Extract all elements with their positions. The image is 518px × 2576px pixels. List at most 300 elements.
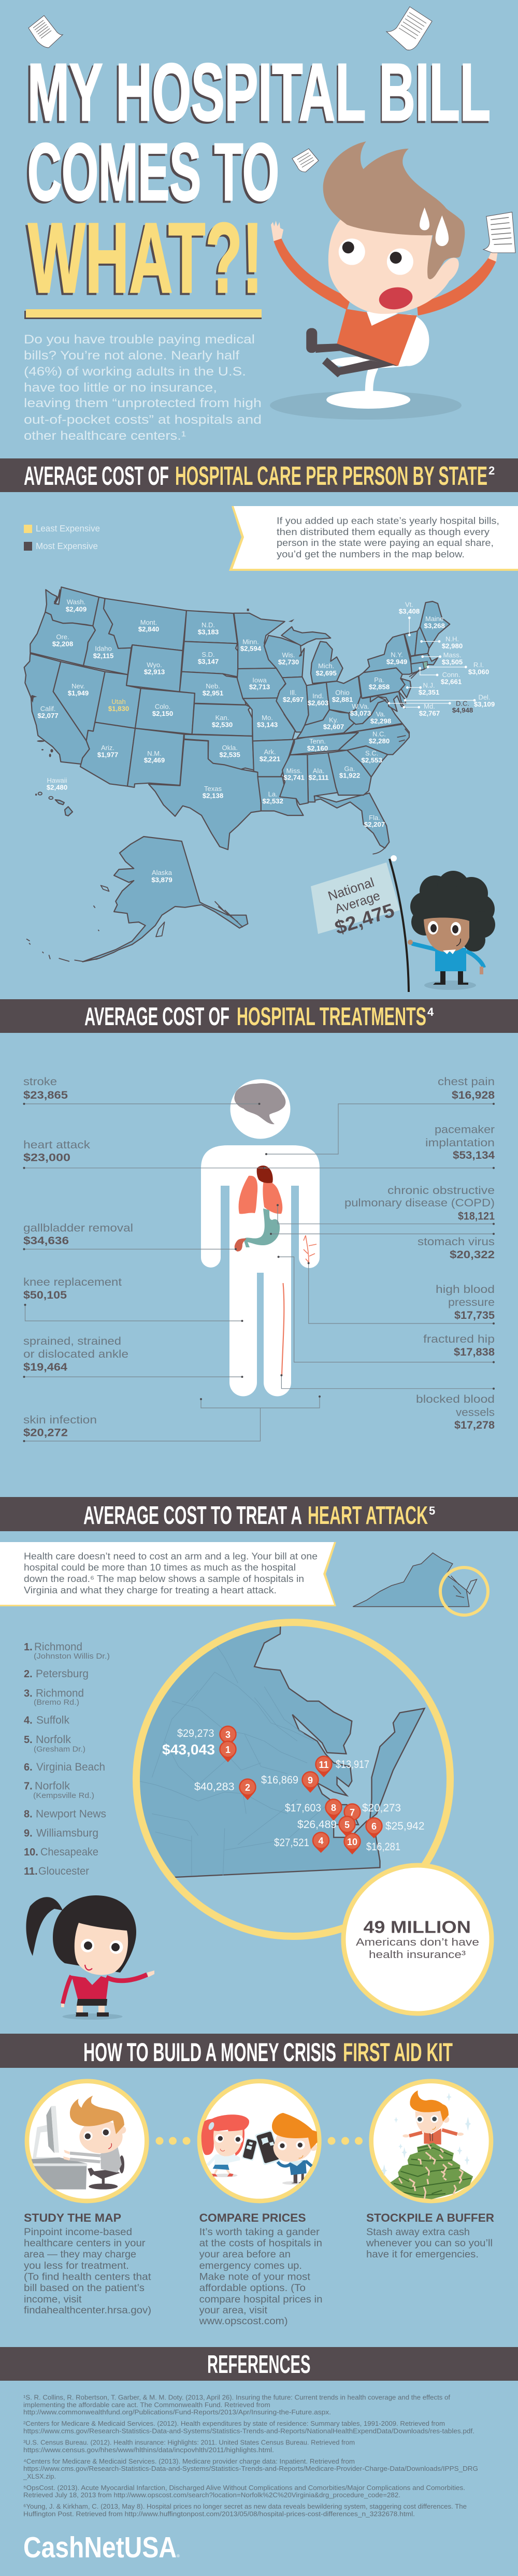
state label: Nev.: $1,949 bbox=[68, 689, 89, 697]
treatment: stroke bbox=[23, 1076, 261, 1105]
treatment: COPD: $18,121 bbox=[458, 1211, 495, 1222]
state label: Ohio bbox=[332, 689, 353, 703]
hospital list: (Kempsville Rd.) bbox=[33, 1791, 94, 1800]
state label: Ohio: $2,881 bbox=[332, 696, 353, 703]
hospital list: Chesapeake bbox=[40, 1846, 98, 1858]
state label: Minn. bbox=[240, 638, 262, 653]
state label: Texas bbox=[203, 785, 223, 800]
treatment: pacemaker implantation bbox=[264, 1124, 495, 1169]
state label: S.D.: S.D. bbox=[202, 651, 215, 658]
organ: lungs bbox=[239, 1176, 282, 1214]
treatment: skin infection: $20,272 bbox=[23, 1427, 68, 1439]
treatment: gallbladder removal: gallbladder removal bbox=[23, 1222, 133, 1234]
treatment: COPD: chronic obstructive bbox=[387, 1185, 495, 1197]
state label: Mont.: Mont. bbox=[140, 618, 157, 626]
step: stockpile a buffer bbox=[366, 2211, 494, 2260]
hospital list: Norfolk bbox=[36, 1734, 71, 1746]
flag pole bbox=[390, 859, 409, 992]
icon circle: man at computer bbox=[27, 2081, 147, 2201]
step: study the map: healthcare centers in your bbox=[24, 2238, 146, 2249]
state label: Wash.: Wash. bbox=[67, 598, 85, 606]
state label: Miss.: $2,741 bbox=[284, 774, 305, 782]
state label: N.Y. bbox=[386, 651, 407, 666]
step: compare prices: Make note of your most bbox=[199, 2271, 311, 2283]
state label with leader: N.H.: N.H. bbox=[445, 635, 459, 643]
state label: Ore. bbox=[52, 633, 73, 647]
title bbox=[25, 47, 491, 315]
hospital list: Richmond bbox=[34, 1641, 82, 1653]
references list bbox=[23, 2394, 478, 2518]
pin 3: 3 bbox=[225, 1730, 231, 1740]
hospital prices: $20,273 bbox=[362, 1802, 401, 1814]
pin 11 bbox=[316, 1756, 332, 1777]
references list: ²Centers for Medicare & Medicaid Services. (2012). Health expenditures by state of residence: Summary tables, 1991-2009. Retrieved from bbox=[23, 2420, 445, 2427]
organ: arm veins bbox=[304, 1235, 316, 1262]
pin 2: 2 bbox=[245, 1782, 250, 1793]
state label with leader: Vt. bbox=[399, 600, 420, 636]
state label: Ga.: $1,922 bbox=[339, 772, 360, 780]
stat circle: 49 million uninsured: Americans don’t have bbox=[356, 1937, 479, 1948]
state label: Wash.: $2,409 bbox=[66, 605, 87, 613]
state label: N.C. bbox=[369, 730, 390, 745]
treatment: stroke: $23,865 bbox=[23, 1089, 68, 1101]
pin 1 bbox=[220, 1742, 236, 1762]
hospital list: 3. bbox=[24, 1688, 33, 1700]
state label: Ariz. bbox=[97, 744, 118, 758]
state label with leader: N.H. bbox=[420, 635, 463, 650]
map: Hawaii islands bbox=[35, 792, 73, 816]
state label: Hawaii: $2,480 bbox=[47, 783, 67, 791]
state label: La. bbox=[263, 790, 283, 805]
treatment: blocked blood vessels: blocked blood bbox=[416, 1393, 495, 1405]
pin 3 bbox=[220, 1726, 236, 1747]
hospital prices: $26,489 bbox=[297, 1819, 337, 1831]
state label: Miss. bbox=[284, 767, 305, 782]
body figure silhouette bbox=[201, 1080, 320, 1397]
treatment: stroke: stroke bbox=[23, 1076, 57, 1088]
state label: Ind.: $2,603 bbox=[308, 699, 328, 707]
icon circle: couple comparing phones bbox=[199, 2081, 319, 2201]
organ: stomach bbox=[243, 1208, 280, 1247]
pin 6: 6 bbox=[371, 1821, 377, 1832]
state label: N.Y.: N.Y. bbox=[391, 651, 403, 658]
treatment: pacemaker implantation: implantation bbox=[425, 1137, 495, 1149]
state label: Kan. bbox=[212, 714, 233, 728]
treatment: high blood pressure bbox=[308, 1262, 495, 1325]
state label: Idaho: $2,115 bbox=[93, 652, 113, 659]
treatment: heart attack: $23,000 bbox=[23, 1152, 70, 1164]
hospital list: (Bremo Rd.) bbox=[34, 1698, 79, 1707]
section header: references bbox=[0, 2347, 518, 2381]
section header: first aid kit: HOW TO BUILD A MONEY CRISIS bbox=[83, 2038, 336, 2067]
treatment: sprained ankle bbox=[23, 1335, 243, 1378]
state label with leader: Del. bbox=[404, 694, 495, 708]
state label: Texas: $2,138 bbox=[203, 792, 223, 800]
intro text: out-of-pocket costs” at hospitals and bbox=[24, 413, 262, 427]
references list: ³U.S. Census Bureau. (2012). Health insurance: Highlights: 2011. United States Census Bureau. Retrieved from bbox=[23, 2439, 355, 2447]
state label: Ark.: Ark. bbox=[264, 748, 276, 756]
stat circle: 49 million uninsured bbox=[343, 1865, 492, 2013]
state label: Ind.: Ind. bbox=[312, 692, 324, 700]
state label: N.M.: $2,469 bbox=[144, 756, 165, 764]
pin 10 bbox=[344, 1834, 361, 1854]
treatment: heart attack: heart attack bbox=[23, 1139, 91, 1151]
state label with leader: N.J.: N.J. bbox=[423, 682, 435, 689]
treatment: pacemaker implantation: pacemaker bbox=[435, 1124, 495, 1136]
treatment: sprained ankle: sprained, strained bbox=[23, 1335, 121, 1347]
state label with leader: D.C. (most expensive): D.C. bbox=[456, 699, 469, 707]
state label: Miss.: Miss. bbox=[286, 767, 302, 774]
state label: Mo. bbox=[257, 714, 278, 728]
hospital prices: $17,603 bbox=[285, 1802, 321, 1814]
state label: Neb.: $2,951 bbox=[203, 689, 223, 697]
pin 6 bbox=[366, 1818, 382, 1838]
hospital prices bbox=[162, 1728, 425, 1853]
hospital prices: $13,917 bbox=[336, 1759, 369, 1771]
state label: Wis. bbox=[278, 651, 299, 666]
section header: heart attack: AVERAGE COST TO TREAT A bbox=[83, 1502, 302, 1530]
treatment: gallbladder removal: $34,636 bbox=[23, 1235, 69, 1247]
callout: heart attack intro: Health care doesn’t need to cost an arm and a leg. Your bill at one bbox=[24, 1551, 318, 1561]
state label: Colo.: Colo. bbox=[155, 703, 170, 711]
pin 5 bbox=[339, 1816, 355, 1837]
state label: Neb. bbox=[203, 682, 223, 697]
hospital list: Norfolk bbox=[35, 1780, 70, 1792]
state label: Mich.: $2,695 bbox=[316, 669, 337, 677]
section header: hospital treatments bbox=[0, 999, 518, 1033]
step: study the map: you less for treatment. bbox=[24, 2260, 129, 2271]
state label: Mont. bbox=[138, 618, 159, 633]
legend: least and most expensive bbox=[24, 523, 100, 551]
state label: N.D.: N.D. bbox=[202, 621, 215, 629]
state label: Neb.: Neb. bbox=[206, 682, 220, 690]
references list: https://www.census.gov/hhes/www/hlthins/data/incpovhlth/2011/highlights.html. bbox=[23, 2447, 274, 2454]
state label: Ala.: Ala. bbox=[313, 767, 324, 774]
treatment: stomach virus: stomach virus bbox=[418, 1236, 495, 1248]
pin 2 bbox=[239, 1779, 256, 1800]
title shadow: WHAT?! bbox=[26, 204, 261, 315]
state label: Ky.: Ky. bbox=[329, 716, 338, 724]
state label: Iowa bbox=[249, 677, 270, 691]
state label: N.M. bbox=[144, 750, 165, 764]
section header: references: REFERENCES bbox=[207, 2351, 311, 2379]
flag text bbox=[323, 872, 397, 939]
state label with leader: Conn.: Conn. bbox=[442, 671, 460, 679]
state label with leader: Vt.: Vt. bbox=[405, 600, 413, 608]
hospital list: 4. bbox=[24, 1715, 33, 1726]
state label: Wyo.: $2,913 bbox=[144, 668, 165, 675]
hospital list: Richmond bbox=[36, 1688, 84, 1700]
state label: N.D. bbox=[198, 621, 219, 636]
pin 4 bbox=[313, 1833, 329, 1853]
dots connector: first pair bbox=[155, 2137, 191, 2145]
icon: flying paper left bbox=[28, 16, 63, 48]
state label: Kan.: $2,530 bbox=[212, 721, 233, 728]
state label: Calif.: Calif. bbox=[40, 705, 55, 713]
treatment: pacemaker implantation: $53,134 bbox=[453, 1149, 495, 1161]
step: study the map: area — they may charge bbox=[24, 2249, 136, 2260]
stat circle: 49 million uninsured: 49 MILLION bbox=[364, 1918, 471, 1937]
state label: Idaho bbox=[93, 645, 113, 659]
intro text: (46%) of working adults in the U.S. bbox=[24, 365, 246, 379]
treatment: chest pain bbox=[265, 1076, 495, 1155]
step: stockpile a buffer: STOCKPILE A BUFFER bbox=[366, 2211, 494, 2224]
state label with leader: N.J. bbox=[406, 682, 439, 696]
state label: N.Y.: $2,949 bbox=[386, 658, 407, 666]
state label: Colo.: $2,150 bbox=[152, 710, 173, 717]
state label: Fla. bbox=[364, 814, 385, 828]
treatment: chest pain: chest pain bbox=[438, 1076, 495, 1088]
state label: Ala. bbox=[309, 767, 328, 782]
references list: ⁶Young, J. & Kirkham, C. (2013, May 8). Hospital prices no longer secret as new data reveals bewildering system, staggering cost differences. The bbox=[23, 2503, 467, 2510]
step: compare prices: at the costs of hospitals in bbox=[199, 2238, 322, 2249]
state label: Okla.: $2,535 bbox=[220, 751, 240, 758]
state label: W.Va.: W.Va. bbox=[352, 702, 369, 710]
map: Alaska bbox=[26, 837, 248, 962]
callout: how the map numbers work bbox=[229, 506, 518, 571]
map: southeastern Virginia hospitals bbox=[125, 1614, 450, 1936]
callout: heart attack intro: Virginia and what they charge for treating a heart attack. bbox=[24, 1585, 277, 1595]
callout: how the map numbers work: then distributed them equally as though every bbox=[277, 527, 490, 537]
state label: Iowa: Iowa bbox=[252, 677, 267, 684]
step: study the map: STUDY THE MAP bbox=[24, 2211, 121, 2224]
state label with leader: Mass.: $3,505 bbox=[442, 658, 463, 666]
state label: Nev. bbox=[68, 682, 89, 697]
treatment: sprained ankle: $19,464 bbox=[23, 1361, 67, 1373]
state label with leader: Del.: $3,109 bbox=[474, 700, 495, 708]
illustration: shocked man on chair bbox=[270, 141, 515, 420]
organ: leg vein bbox=[282, 1283, 284, 1375]
hospital prices: $25,942 bbox=[385, 1820, 425, 1832]
pin 7: 7 bbox=[350, 1807, 355, 1818]
treatment: knee replacement: knee replacement bbox=[23, 1276, 122, 1288]
state label: Colo. bbox=[152, 703, 173, 717]
section header: hospital treatments: 4 bbox=[427, 1005, 434, 1018]
step: compare prices: affordable options. (To bbox=[199, 2282, 306, 2294]
state label: Iowa: $2,713 bbox=[249, 683, 270, 691]
state label with leader: Del.: Del. bbox=[478, 694, 491, 701]
treatment: sprained ankle: or dislocated ankle bbox=[23, 1348, 128, 1360]
hospital list: (Johnston Willis Dr.) bbox=[34, 1652, 110, 1661]
state label: Okla.: Okla. bbox=[222, 744, 238, 752]
state label: Mo.: Mo. bbox=[262, 714, 273, 722]
organ: brain bbox=[234, 1083, 285, 1124]
state label: Hawaii bbox=[47, 776, 67, 791]
state label: Pa.: $2,858 bbox=[369, 683, 390, 690]
state label: S.C.: $2,553 bbox=[362, 756, 382, 764]
state label with leader: Conn. bbox=[419, 667, 462, 685]
state label: Ky.: $2,607 bbox=[323, 723, 344, 730]
references list: implementing the affordable care act. The Commonwealth Fund. Retrieved from bbox=[23, 2401, 270, 2409]
step: study the map: findahealthcenter.hrsa.gov) bbox=[24, 2305, 151, 2316]
state label: Ky. bbox=[323, 716, 344, 730]
state label: Va. bbox=[370, 710, 391, 725]
hospital prices: $43,043 bbox=[162, 1742, 215, 1758]
state label: S.C.: S.C. bbox=[365, 750, 378, 757]
treatment: COPD: pulmonary disease (COPD) bbox=[344, 1197, 495, 1209]
state label: Wyo. bbox=[144, 661, 165, 675]
section header: first aid kit bbox=[0, 2034, 518, 2068]
references list: ¹S. R. Collins, R. Robertson, T. Garber, & M. M. Doty. (2013, April 26). Insuring the future: Current trends in health coverage and the effects of bbox=[23, 2394, 451, 2401]
state label: Texas: Texas bbox=[204, 785, 222, 793]
icon: Virginia locator map bbox=[353, 1553, 488, 1615]
state label: S.D.: $3,147 bbox=[198, 657, 219, 665]
legend: least and most expensive: Most Expensive bbox=[36, 541, 98, 551]
illustration: girl pointing bbox=[26, 1895, 154, 2020]
icon: flying paper right bbox=[386, 7, 432, 50]
step: compare prices: COMPARE PRICES bbox=[199, 2211, 306, 2224]
state label: Wis.: Wis. bbox=[282, 651, 295, 659]
hospital list: Gloucester bbox=[38, 1865, 89, 1877]
organ: gallbladder bbox=[235, 1239, 246, 1251]
treatment: stomach virus bbox=[270, 1233, 495, 1261]
pin 8 bbox=[325, 1800, 342, 1821]
state label: Tenn.: $2,160 bbox=[307, 744, 328, 752]
step: compare prices: emergency comes up. bbox=[199, 2260, 302, 2271]
state label: Ill.: Ill. bbox=[290, 689, 296, 697]
callout: heart attack intro: hospital could be more than 10 times as much as the hospital bbox=[24, 1562, 296, 1573]
step: compare prices: your area before an bbox=[199, 2249, 291, 2260]
state label with leader: R.I.: $3,060 bbox=[468, 668, 489, 676]
state label: La.: $2,532 bbox=[263, 797, 283, 805]
pin 5: 5 bbox=[344, 1820, 350, 1830]
references list: ⁵OpsCost. (2013). Acute Myocardial Infarction, Discharged Alive Without Complications and Comorbities/Major Complications and Comorbities. bbox=[23, 2484, 465, 2492]
state label: Tenn.: Tenn. bbox=[309, 738, 326, 745]
state label: Alaska: $3,879 bbox=[151, 876, 172, 884]
title shadow: COMES TO bbox=[25, 129, 277, 220]
state label: Calif.: $2,077 bbox=[37, 712, 59, 719]
state label with leader: Mass. bbox=[421, 651, 463, 666]
references list: _XLSX.zip. bbox=[23, 2473, 56, 2480]
state label: Ariz.: Ariz. bbox=[101, 744, 114, 752]
pin 7 bbox=[344, 1804, 361, 1820]
state label: Maine: Maine bbox=[425, 615, 443, 623]
state label: Okla. bbox=[220, 744, 240, 758]
state label with leader: D.C. (most expensive): $4,948 bbox=[452, 707, 473, 714]
state label with leader: R.I.: R.I. bbox=[473, 661, 484, 669]
state label: Ga. bbox=[339, 765, 360, 780]
treatment: high blood pressure: $17,735 bbox=[454, 1309, 495, 1321]
callout: how the map numbers work: person in the state were paying an equal share, bbox=[277, 538, 494, 548]
state label: Alaska bbox=[151, 869, 172, 884]
hospital list: Newport News bbox=[36, 1808, 106, 1820]
state label: Fla.: $2,207 bbox=[364, 821, 385, 828]
intro text: other healthcare centers.¹ bbox=[24, 429, 186, 443]
hospital list: Virginia Beach bbox=[36, 1761, 105, 1773]
state label: N.M.: N.M. bbox=[147, 750, 162, 757]
map: eastern states bbox=[264, 601, 450, 804]
treatment: knee replacement: $50,105 bbox=[23, 1289, 67, 1301]
state label: Ark.: $2,221 bbox=[260, 755, 280, 763]
county lines bbox=[139, 1643, 334, 1876]
section header: hospital treatments: AVERAGE COST OF bbox=[84, 1003, 229, 1031]
state label: Tenn. bbox=[307, 738, 328, 752]
state label: Mich.: Mich. bbox=[318, 662, 334, 670]
state label: Calif. bbox=[37, 705, 59, 719]
treatment: skin infection bbox=[23, 1395, 321, 1442]
step: compare prices: It’s worth taking a gander bbox=[199, 2226, 320, 2238]
step: compare prices: www.opscost.com) bbox=[199, 2315, 288, 2327]
treatment: high blood pressure: pressure bbox=[448, 1297, 495, 1308]
step: stockpile a buffer: have it for emergencies. bbox=[366, 2249, 479, 2260]
title line 3: WHAT?! bbox=[28, 202, 263, 313]
map: western states bbox=[24, 587, 254, 787]
legend: least and most expensive: Least Expensive bbox=[36, 523, 100, 534]
state label: Ala.: $2,111 bbox=[309, 774, 328, 782]
flag text: Average bbox=[333, 888, 382, 916]
pin 9 bbox=[303, 1772, 318, 1793]
pin 10: 10 bbox=[347, 1837, 357, 1847]
intro text: have too little or no insurance, bbox=[24, 381, 217, 395]
callout: heart attack intro: down the road.⁶ The map below shows a sample of hospitals in bbox=[24, 1574, 304, 1584]
logo: CashNetUSA: CashNetUSA bbox=[23, 2531, 177, 2564]
hospital list: 11. bbox=[24, 1866, 38, 1877]
state label: W.Va.: $3,073 bbox=[350, 709, 371, 717]
treatment: gallbladder removal bbox=[23, 1222, 237, 1250]
intro text bbox=[24, 333, 262, 443]
flag text: National bbox=[326, 875, 376, 903]
references list: https://www.cms.gov/Research-Statistics-Data-and-Systems/Statistics-Trends-and-Reports/Medicare-Provider-Charge-Data/Downloads/IPPS_DRG bbox=[23, 2465, 478, 2472]
state label: Ariz.: $1,977 bbox=[97, 751, 118, 758]
state label: Utah (least expensive): Utah bbox=[111, 698, 126, 706]
state label with leader: Mass.: Mass. bbox=[443, 651, 461, 659]
hospital list: 10. bbox=[24, 1847, 38, 1858]
pin 1: 1 bbox=[225, 1745, 231, 1755]
stat circle: 49 million uninsured: health insurance³ bbox=[369, 1949, 466, 1961]
treatment: chest pain: $16,928 bbox=[452, 1089, 495, 1101]
step: study the map: Pinpoint income-based bbox=[24, 2226, 132, 2238]
state label: Alaska: Alaska bbox=[152, 869, 172, 876]
state label: S.D. bbox=[198, 651, 219, 665]
state label: Va.: $2,298 bbox=[370, 717, 391, 725]
hospital prices: $27,521 bbox=[274, 1837, 309, 1849]
treatment: fractured hip: fractured hip bbox=[423, 1333, 495, 1345]
callout: how the map numbers work: you’d get the numbers in the map below. bbox=[277, 549, 465, 559]
hospital list: Williamsburg bbox=[36, 1827, 98, 1839]
step: study the map: (To find health centers that bbox=[24, 2271, 151, 2283]
illustration: person with afro holding flag bbox=[408, 871, 495, 990]
state label: Ind. bbox=[308, 692, 328, 707]
hospital list: 6. bbox=[24, 1762, 33, 1773]
hospital list: (Gresham Dr.) bbox=[34, 1745, 85, 1754]
hospital list: 7. bbox=[24, 1781, 33, 1792]
treatment: fractured hip: $17,838 bbox=[454, 1346, 495, 1358]
state label: Minn.: Minn. bbox=[242, 638, 259, 645]
hospital list: Petersburg bbox=[36, 1668, 89, 1680]
treatment: heart attack bbox=[23, 1139, 265, 1169]
state label: Ark. bbox=[260, 748, 280, 763]
state label: Wash. bbox=[66, 598, 87, 613]
state label: Ore.: $2,208 bbox=[52, 640, 73, 647]
state label: Utah (least expensive): $1,830 bbox=[108, 704, 129, 712]
state label with leader: R.I. bbox=[427, 661, 489, 676]
section header: heart attack bbox=[0, 1497, 518, 1531]
organ: heart bbox=[257, 1165, 273, 1183]
state label: Mich. bbox=[316, 662, 337, 677]
treatment: fractured hip bbox=[278, 1256, 495, 1363]
state label: N.C.: N.C. bbox=[372, 730, 386, 738]
state label: Ohio: Ohio bbox=[335, 689, 350, 697]
state label with leader: Md. bbox=[402, 702, 440, 717]
state label: Kan.: Kan. bbox=[215, 714, 229, 722]
hospital list bbox=[24, 1641, 110, 1877]
references list: Retrieved July 18, 2013 from http://www.opscost.com/search?location=Norfolk%2C%20Virginia&drg_procedure_code=282. bbox=[23, 2492, 400, 2499]
state label: Ill. bbox=[283, 689, 304, 703]
state label: Maine bbox=[424, 615, 445, 630]
step: compare prices bbox=[199, 2211, 322, 2327]
hospital list: 2. bbox=[24, 1668, 33, 1680]
intro text: Do you have trouble paying medical bbox=[24, 333, 255, 347]
